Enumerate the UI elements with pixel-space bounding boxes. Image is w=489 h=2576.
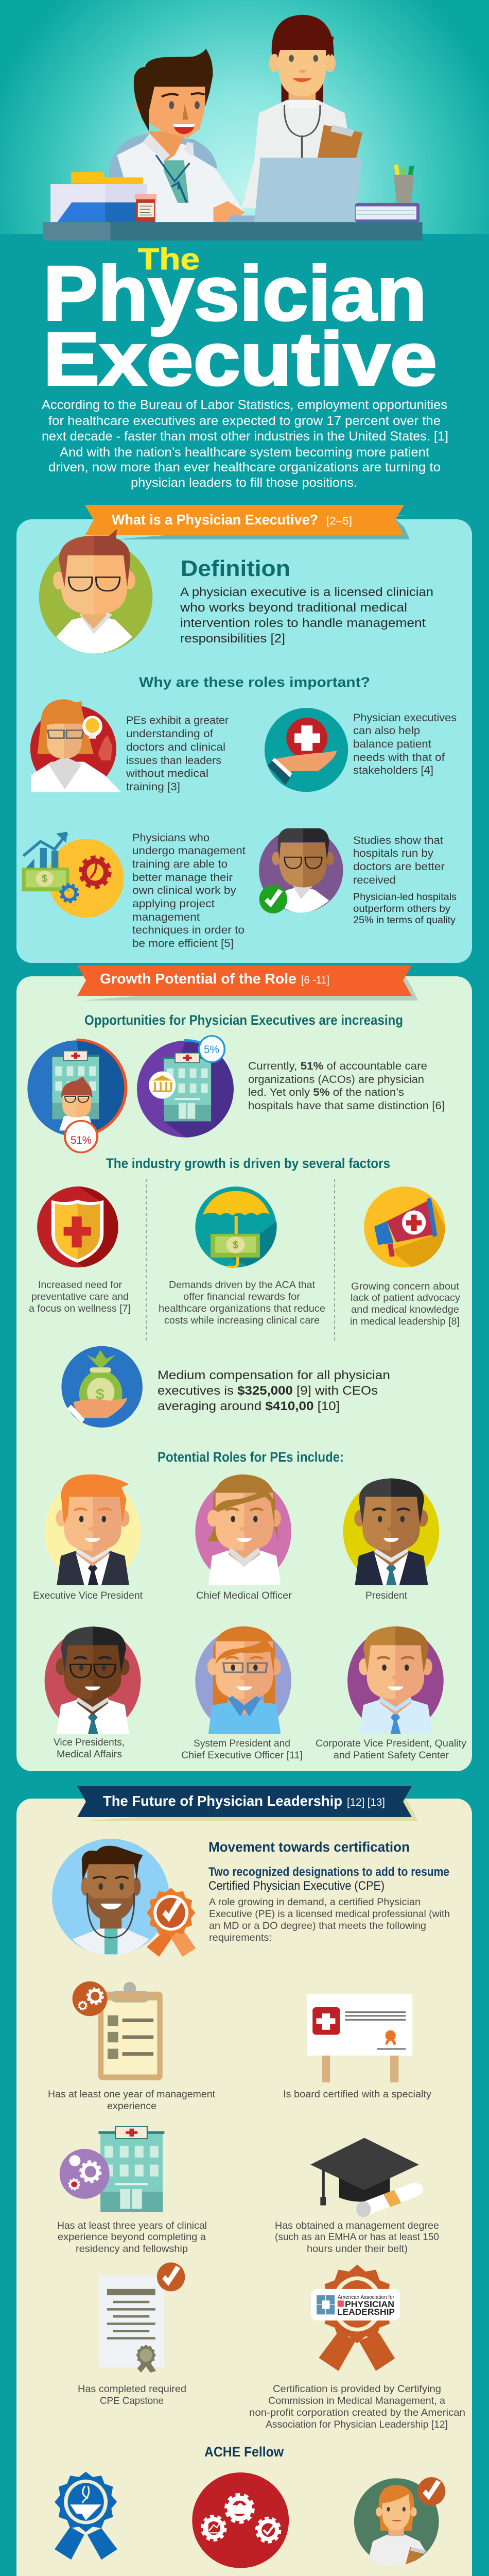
title: Physician bbox=[43, 250, 427, 336]
label: President bbox=[365, 1590, 408, 1601]
text: preventative care: preventative care and bbox=[31, 1291, 129, 1302]
text: management degree: Has obtained a management degree bbox=[275, 2220, 439, 2231]
text: PEs understand: doctors and clinical bbox=[126, 741, 225, 753]
avatar: system president and CEO bbox=[195, 1626, 291, 1734]
text: currently 51%: organizations (ACOs) are physician bbox=[248, 1074, 424, 1086]
avatar: vice president medical affairs bbox=[45, 1626, 141, 1734]
banner: what is a physician executive: [2–5] bbox=[326, 515, 352, 527]
text: management training: techniques in order to bbox=[132, 924, 244, 936]
text: patient advocacy bbox=[350, 1281, 460, 1327]
heading: opportunities: Opportunities for Physician Executives are increasing bbox=[84, 1012, 403, 1028]
icon: megaphone bbox=[364, 1187, 445, 1267]
text: studies show: outperform others by bbox=[353, 903, 450, 914]
text: studies show: received bbox=[353, 874, 396, 886]
text: management degree bbox=[275, 2220, 439, 2255]
text: demands driven by ACA: offer financial rewards for bbox=[183, 1291, 301, 1302]
text: compensation: Medium compensation for all physician bbox=[158, 1368, 390, 1382]
text: PEs understand: PEs exhibit a greater bbox=[126, 715, 229, 726]
intro text: driven, now more than ever healthcare organizations are turning to bbox=[48, 460, 441, 474]
label: Medical Affairs bbox=[57, 1749, 122, 1760]
text: management training: own clinical work by bbox=[132, 885, 237, 896]
definition text bbox=[180, 585, 433, 646]
icon: red circle with gears bbox=[192, 2472, 289, 2568]
icon: capstone document bbox=[99, 2262, 185, 2372]
AAPL logo text: LEADERSHIP bbox=[337, 2308, 395, 2317]
text: management training: management bbox=[132, 911, 200, 923]
text: management training bbox=[132, 832, 246, 950]
intro text: next decade - faster than most other industries in the United States. [1] bbox=[42, 429, 448, 444]
text: PEs understand: issues than leaders bbox=[126, 755, 221, 767]
certification text: A role growing in demand, a certified Physician bbox=[209, 1896, 421, 1908]
icon: shield with cross bbox=[37, 1187, 118, 1267]
definition text: who works beyond traditional medical bbox=[180, 601, 407, 615]
dollar sign on banknote: $ bbox=[233, 1240, 238, 1251]
text: management training: training are able to bbox=[132, 858, 228, 870]
text: certification provider: Association for Physician Leadership [12] bbox=[266, 2419, 448, 2430]
text: management training: applying project bbox=[132, 898, 215, 910]
avatar: president bbox=[343, 1478, 439, 1585]
banner: future of leadership bbox=[77, 1786, 418, 1821]
icon: doctor with glasses bbox=[39, 529, 152, 653]
text: patient advocacy: lack of patient advocacy bbox=[351, 1292, 460, 1303]
text: PEs understand: without medical bbox=[126, 768, 208, 779]
text: balance patient needs: balance patient bbox=[353, 738, 431, 750]
text: studies show: hospitals run by bbox=[353, 848, 434, 859]
icon: graduation cap and diploma bbox=[310, 2138, 419, 2217]
certification text: Two recognized designations to add to resume bbox=[208, 1865, 449, 1879]
avatar: chief medical officer bbox=[195, 1475, 291, 1585]
text: studies show bbox=[353, 835, 457, 926]
label bbox=[181, 1738, 303, 1761]
laptop bbox=[226, 158, 362, 223]
definition text: A physician executive is a licensed clinician bbox=[180, 585, 433, 599]
banner: future of leadership: [12] [13] bbox=[347, 1797, 385, 1808]
panel: future of physician leadership bbox=[16, 1786, 472, 2576]
text: currently 51%: Currently, 51% of accountable care bbox=[248, 1060, 427, 1072]
text: management training: better manage their bbox=[132, 872, 233, 884]
text: PEs understand: understanding of bbox=[126, 728, 213, 740]
label: 5%: 5% bbox=[204, 1044, 219, 1056]
icon: 51% doctor-led hospital bbox=[27, 1040, 126, 1153]
text: management experience: experience bbox=[107, 2100, 156, 2112]
banner: growth potential bbox=[77, 965, 418, 1001]
certification text: an MD or a DO degree) that meets the following bbox=[209, 1920, 426, 1931]
banner: what is a physician executive bbox=[85, 505, 410, 539]
label: Corporate Vice President, Quality bbox=[316, 1738, 466, 1749]
desk bbox=[43, 222, 423, 241]
text: studies show: Physician-led hospitals bbox=[353, 891, 457, 903]
label bbox=[54, 1737, 125, 1760]
text: certification provider: Certification is provided by Certifying bbox=[273, 2383, 441, 2395]
heading: ACHE fellow: ACHE Fellow bbox=[204, 2444, 284, 2460]
label: Chief Executive Officer [11] bbox=[181, 1750, 303, 1761]
panel: what is a physician executive bbox=[16, 505, 472, 963]
label: Vice Presidents, bbox=[54, 1737, 125, 1748]
icon: AAPL rosette badge bbox=[311, 2264, 400, 2371]
AAPL logo text bbox=[337, 2294, 395, 2317]
text: management degree: (such as an EMHA or has at least 150 bbox=[275, 2231, 439, 2243]
text: studies show: Studies show that bbox=[353, 835, 443, 846]
AAPL logo text: PHYSICIAN bbox=[345, 2300, 394, 2309]
icon: doctor with rosette bbox=[52, 1839, 196, 1957]
definition text: intervention roles to handle management bbox=[180, 616, 426, 630]
text: balance patient needs: stakeholders [4] bbox=[353, 765, 433, 776]
panel: growth potential bbox=[16, 965, 472, 1771]
avatar: executive vice president bbox=[45, 1475, 141, 1585]
certification text: requirements: bbox=[209, 1932, 272, 1943]
heading: potential roles: Potential Roles for PEs include: bbox=[158, 1449, 344, 1465]
text: management training: be more efficient [5] bbox=[132, 938, 234, 950]
definition heading: Definition bbox=[181, 556, 290, 581]
text: demands driven by ACA: healthcare organizations that reduce bbox=[159, 1303, 325, 1314]
title bbox=[43, 243, 437, 401]
icon: chart, money and gears bbox=[22, 832, 124, 918]
text: demands driven by ACA bbox=[159, 1279, 325, 1326]
text: certification provider: Commission in Medical Management, a bbox=[268, 2395, 445, 2406]
heading: movement towards certification: Movement towards certification bbox=[208, 1839, 410, 1855]
woman doctor bbox=[242, 15, 362, 210]
banner: what is a physician executive: What is a Physician Executive? bbox=[112, 512, 318, 528]
text: clinical experience: experience beyond completing a bbox=[58, 2231, 206, 2243]
banner: growth potential: Growth Potential of the Role bbox=[100, 971, 296, 987]
intro text: And with the nation’s healthcare system becoming more patient bbox=[60, 445, 429, 460]
label: System President and bbox=[194, 1738, 290, 1749]
text: demands driven by ACA: Demands driven by the ACA that bbox=[169, 1279, 316, 1291]
avatar: corporate vice president bbox=[347, 1626, 444, 1734]
text: PEs understand: training [3] bbox=[126, 781, 180, 793]
text: preventative care: Increased need for bbox=[38, 1279, 123, 1291]
label: 51%: 51% bbox=[71, 1134, 92, 1146]
text: clinical experience bbox=[57, 2220, 207, 2255]
icon: money bag in hand bbox=[61, 1346, 143, 1428]
icon: hand holding cross bbox=[265, 708, 348, 792]
man doctor bbox=[109, 48, 245, 224]
text: balance patient needs: Physician executives bbox=[353, 712, 457, 724]
text: preventative care bbox=[29, 1279, 131, 1314]
text: patient advocacy: in medical leadership [8] bbox=[350, 1316, 460, 1327]
intro text: physician leaders to fill those positions. bbox=[131, 476, 357, 490]
stacked folders bbox=[50, 172, 147, 223]
text: currently 51%: led. Yet only 5% of the nation’s bbox=[248, 1087, 404, 1098]
pill bottle bbox=[135, 194, 156, 223]
label bbox=[316, 1738, 466, 1761]
intro text: for healthcare executives are expected to grow 17 percent over the bbox=[48, 414, 441, 428]
text: demands driven by ACA: costs while increasing clinical care bbox=[164, 1315, 320, 1326]
label: and Patient Safety Center bbox=[334, 1750, 449, 1761]
text: compensation bbox=[158, 1368, 390, 1413]
text: CPE capstone: CPE Capstone bbox=[100, 2395, 164, 2406]
text: management degree: hours under their belt) bbox=[307, 2243, 408, 2255]
text: CPE capstone: Has completed required bbox=[78, 2383, 186, 2395]
intro text: According to the Bureau of Labor Statistics, employment opportunities bbox=[42, 398, 447, 412]
text: currently 51%: hospitals have that same distinction [6] bbox=[248, 1100, 445, 1112]
text: certification provider: non-profit corporation created by the American bbox=[249, 2407, 465, 2418]
icon: 5% physician-led hospital bbox=[137, 1036, 234, 1138]
certification text: Certified Physician Executive (CPE) bbox=[208, 1879, 385, 1893]
title: The bbox=[138, 243, 200, 276]
text: management experience: Has at least one year of management bbox=[48, 2089, 216, 2100]
text: studies show: doctors are better bbox=[353, 861, 445, 873]
pen cup and book bbox=[355, 164, 420, 223]
label: Executive Vice President bbox=[33, 1590, 143, 1601]
heading: why important: Why are these roles important? bbox=[139, 674, 370, 690]
text: CPE capstone bbox=[78, 2383, 186, 2406]
icon: ACHE blue ribbon bbox=[55, 2471, 117, 2560]
text: studies show: 25% in terms of quality bbox=[353, 914, 456, 926]
dollar sign on money bag: $ bbox=[96, 1386, 104, 1403]
banner: growth potential: [6 -11] bbox=[301, 974, 329, 986]
heading: industry growth: The industry growth is driven by several factors bbox=[106, 1156, 390, 1171]
text: clinical experience: Has at least three years of clinical bbox=[57, 2220, 207, 2231]
intro text bbox=[42, 398, 448, 490]
text: clinical experience: residency and fellowship bbox=[76, 2243, 188, 2255]
text: patient advocacy: Growing concern about bbox=[351, 1281, 460, 1292]
text: currently 51% bbox=[248, 1060, 445, 1112]
text: management experience bbox=[48, 2089, 216, 2112]
text: balance patient needs: can also help bbox=[353, 725, 420, 737]
text: preventative care: a focus on wellness [7] bbox=[29, 1303, 131, 1314]
icon: board certificate bbox=[307, 1994, 412, 2082]
definition text: responsibilities [2] bbox=[180, 632, 285, 646]
label: Chief Medical Officer bbox=[196, 1590, 292, 1601]
text: board certified: Is board certified with a specialty bbox=[283, 2089, 431, 2100]
header illustration: doctors at desk bbox=[0, 0, 489, 241]
text: management training: undergo management bbox=[132, 845, 246, 857]
text: compensation: executives is $325,000 [9] with CEOs bbox=[158, 1384, 378, 1398]
icon: woman with light bulb bbox=[30, 699, 121, 792]
certification text bbox=[208, 1865, 450, 1943]
title: Executive bbox=[43, 317, 437, 401]
AAPL logo text: American Association for bbox=[338, 2294, 394, 2300]
icon: woman with clipboard bbox=[354, 2477, 445, 2565]
icon: clipboard checklist bbox=[73, 1981, 163, 2080]
icon: hospital with gears bbox=[60, 2127, 164, 2212]
text: balance patient needs: needs with that of bbox=[353, 752, 445, 764]
text: PEs understand bbox=[126, 715, 229, 793]
icon: umbrella over money bbox=[195, 1187, 277, 1267]
certification text: Executive (PE) is a licensed medical professional (with bbox=[209, 1908, 450, 1920]
text: patient advocacy: and medical knowledge bbox=[351, 1304, 459, 1315]
text: balance patient needs bbox=[353, 712, 457, 776]
dollar sign on banknote: $ bbox=[42, 873, 47, 885]
text: compensation: averaging around $410,00 [10] bbox=[158, 1399, 340, 1413]
text: management training: Physicians who bbox=[132, 832, 209, 844]
icon: doctor with check bbox=[259, 828, 343, 913]
banner: future of leadership: The Future of Physician Leadership bbox=[103, 1793, 342, 1809]
text: certification provider bbox=[249, 2383, 465, 2430]
